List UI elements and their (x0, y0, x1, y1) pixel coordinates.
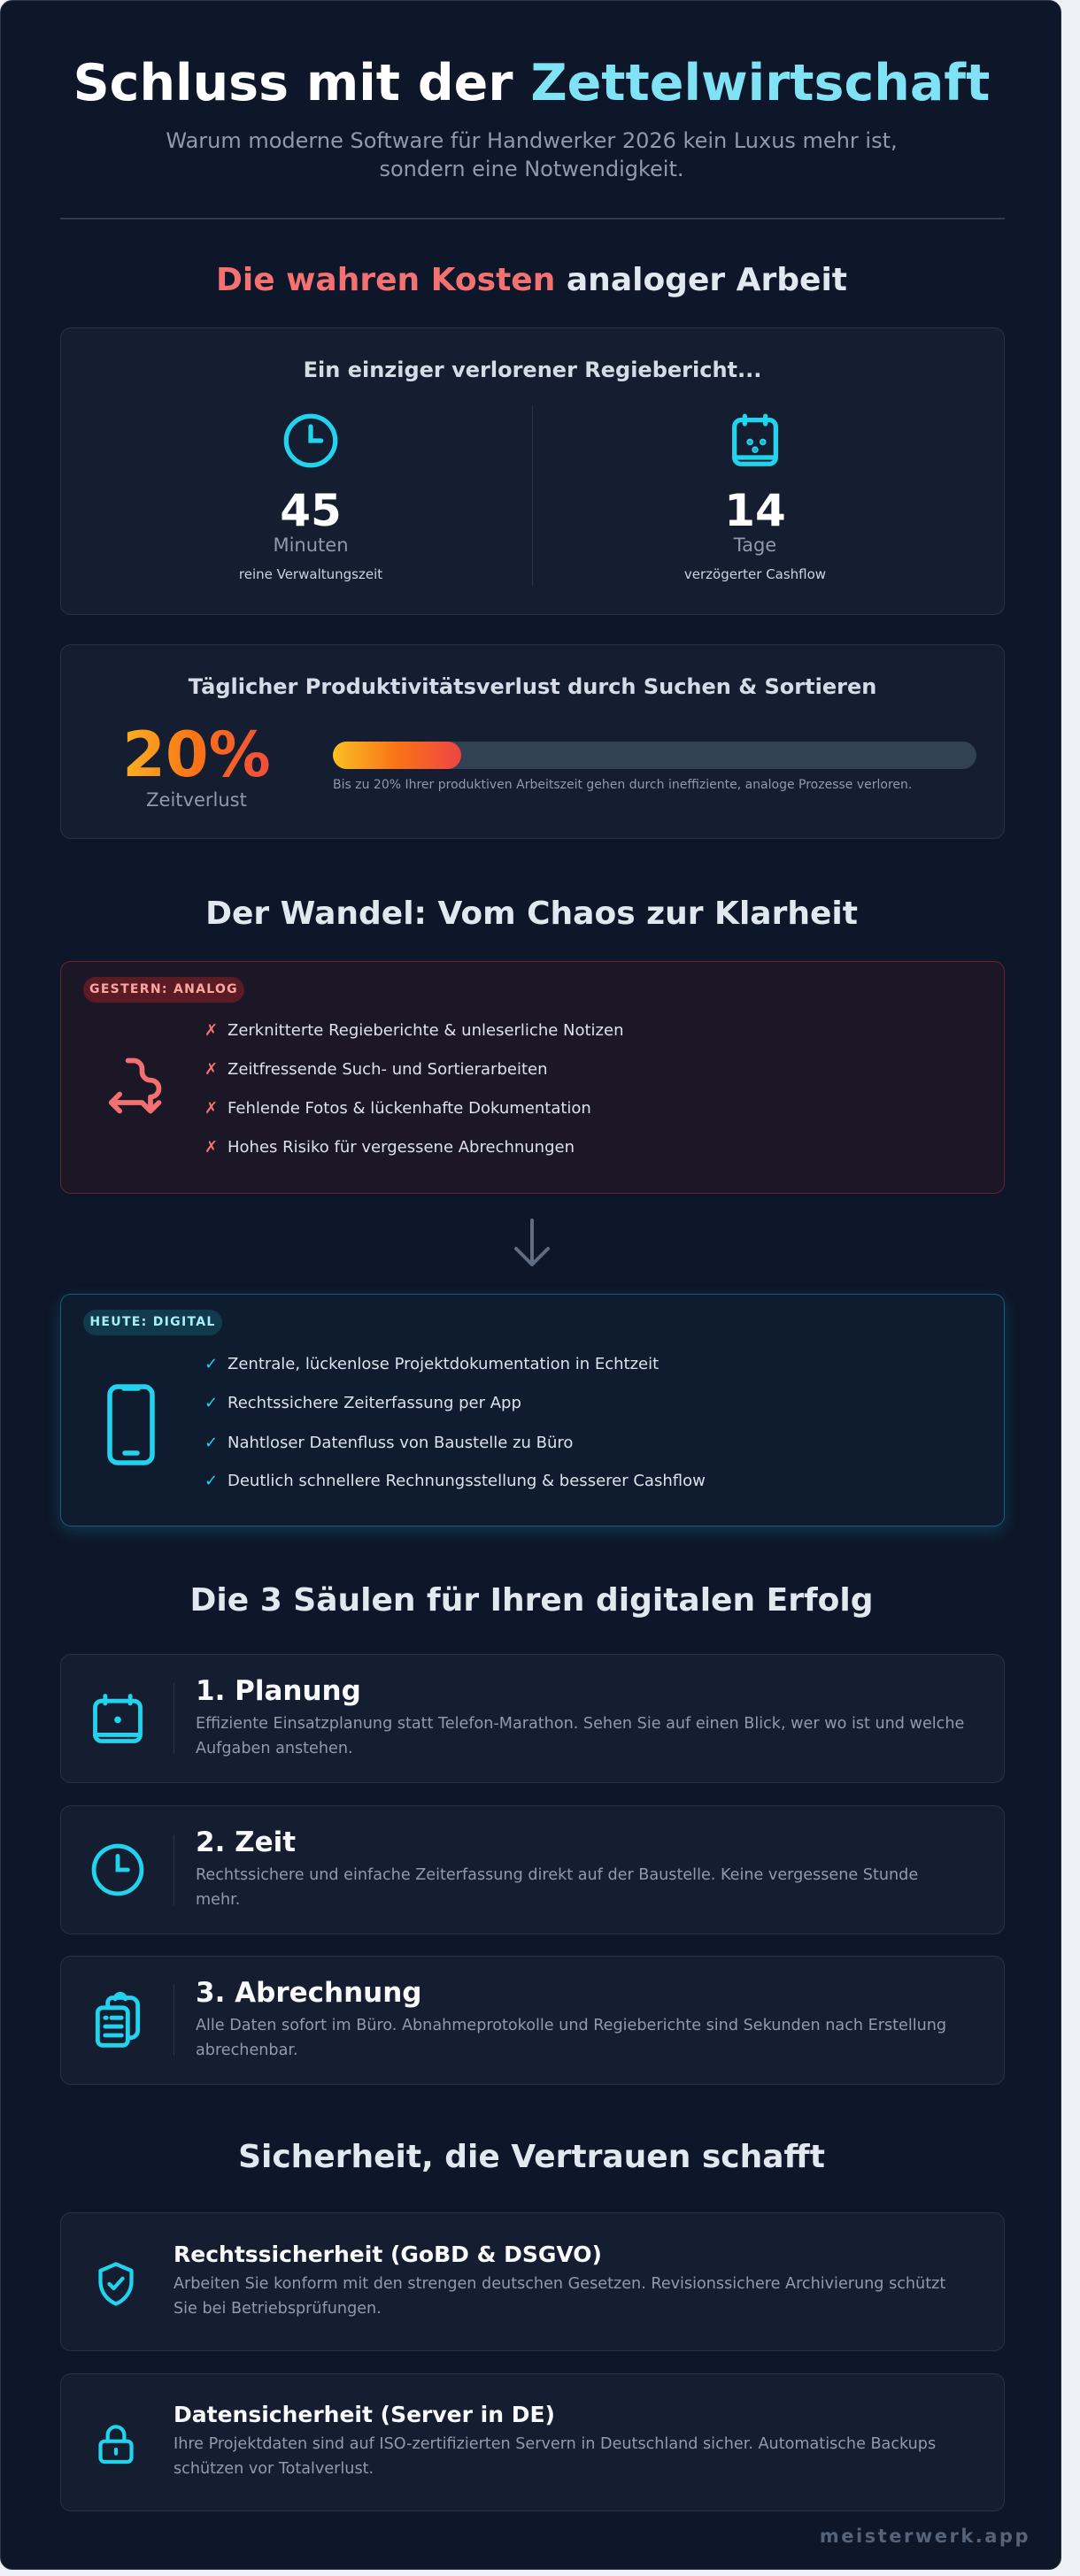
list: analog problems: ✗ (204, 1021, 218, 1040)
pillar text: mehr. (196, 1891, 240, 1909)
security text (174, 2242, 945, 2318)
icon: clipboard (96, 1991, 140, 2048)
panel: yesterday analog (60, 961, 1005, 1194)
security text: Ihre Projektdaten sind auf ISO-zertifizierten Servern in Deutschland sicher. Automatische Backups (174, 2435, 936, 2453)
list: digital benefits: ✓ (204, 1434, 218, 1452)
pillar: time (60, 1805, 1005, 1934)
stat: 14 days: Tage (734, 534, 776, 556)
big stat 20%: Zeitverlust (146, 789, 247, 811)
title: Schluss mit der Zettelwirtschaft (73, 54, 990, 112)
list: digital benefits: Deutlich schnellere Rechnungsstellung & besserer Cashflow (228, 1472, 706, 1490)
panel: today digital (60, 1294, 1005, 1526)
list: digital benefits: ✓ (204, 1355, 218, 1373)
progress bar (333, 742, 976, 769)
pillar text (196, 1826, 918, 1909)
stat: 45 minutes: 45 (280, 485, 342, 536)
security card: data (60, 2373, 1005, 2511)
card heading: Ein einziger verlorener Regiebericht... (304, 358, 761, 382)
pillar text: Effiziente Einsatzplanung statt Telefon-Marathon. Sehen Sie auf einen Blick, wer wo ist und welche Aufgaben anstehen. (196, 1715, 964, 1757)
icon: clock (283, 414, 338, 467)
badge: GESTERN: GESTERN: ANALOG (89, 982, 238, 996)
card heading: Täglicher Produktivitätsverlust durch Suchen & Sortieren (189, 674, 876, 699)
heading: security: Sicherheit, die Vertrauen schafft (238, 2139, 825, 2175)
list: analog problems: Hohes Risiko für vergessene Abrechnungen (228, 1138, 575, 1157)
security text: Rechtssicherheit (GoBD & DSGVO) (174, 2242, 602, 2267)
panel: productivity loss (60, 644, 1005, 839)
security text: schützen vor Totalverlust. (174, 2460, 374, 2478)
icon: return arrow (108, 1058, 161, 1113)
icon: clock (92, 1844, 143, 1895)
stat: 14 days: verzögerter Cashflow (684, 566, 826, 582)
big stat 20%: 20% (122, 719, 271, 791)
security text (174, 2402, 936, 2478)
list: digital benefits: Zentrale, lückenlose Projektdokumentation in Echtzeit (228, 1355, 659, 1373)
heading: pillars: Die 3 Säulen für Ihren digitalen Erfolg (190, 1582, 873, 1619)
stat: 14 days (684, 414, 826, 582)
icon: calendar (93, 1694, 143, 1743)
stat: 14 days: 14 (724, 485, 786, 536)
list: analog problems: Zeitfressende Such- und Sortierarbeiten (228, 1060, 548, 1079)
pillar text: 2. Zeit (196, 1826, 296, 1858)
subtitle: sondern eine Notwendigkeit. (379, 157, 684, 181)
pillar text: 1. Planung (196, 1675, 361, 1707)
stat: 45 minutes (239, 414, 382, 582)
icon: shield check (98, 2262, 134, 2306)
badge: HEUTE: HEUTE: DIGITAL (89, 1315, 216, 1329)
list: analog problems: ✗ (204, 1060, 218, 1079)
bar caption: Bis zu 20% Ihrer produktiven Arbeitszeit gehen durch ineffiziente, analoge Prozesse verloren. (333, 778, 912, 792)
list: analog problems (204, 1021, 623, 1157)
heading: transformation: Der Wandel: Vom Chaos zur Klarheit (205, 896, 858, 932)
security text: Datensicherheit (Server in DE) (174, 2402, 555, 2427)
icon: smartphone (107, 1384, 155, 1465)
panel: lost report (60, 327, 1005, 615)
pillar: planning (60, 1654, 1005, 1783)
pillar text: Alle Daten sofort im Büro. Abnahmeprotokolle und Regieberichte sind Sekunden nach Erstellung (196, 2017, 946, 2034)
list: analog problems: ✗ (204, 1138, 218, 1157)
pillar text: Rechtssichere und einfache Zeiterfassung direkt auf der Baustelle. Keine vergessene Stunde (196, 1866, 918, 1884)
list: analog problems: ✗ (204, 1099, 218, 1118)
stat: 45 minutes: reine Verwaltungszeit (239, 566, 382, 582)
heading: costs: Die wahren Kosten analoger Arbeit (216, 262, 847, 298)
icon: calendar (732, 414, 778, 466)
badge: GESTERN (83, 977, 244, 1003)
pillar text (196, 1675, 964, 1757)
security text: Arbeiten Sie konform mit den strengen deutschen Gesetzen. Revisionssichere Archivierung schützt (174, 2275, 945, 2293)
list: digital benefits: Nahtloser Datenfluss von Baustelle zu Büro (228, 1434, 573, 1452)
list: digital benefits: Rechtssichere Zeiterfassung per App (228, 1394, 521, 1412)
pillar text: abrechenbar. (196, 2042, 298, 2059)
list: digital benefits (204, 1355, 706, 1490)
list: digital benefits: ✓ (204, 1394, 218, 1412)
pillar text (196, 1977, 946, 2059)
subtitle (166, 128, 898, 181)
list: analog problems: Zerknitterte Regieberichte & unleserliche Notizen (228, 1021, 623, 1040)
subtitle: Warum moderne Software für Handwerker 2026 kein Luxus mehr ist, (166, 128, 898, 153)
list: analog problems: Fehlende Fotos & lückenhafte Dokumentation (228, 1099, 591, 1118)
pillar text: 3. Abrechnung (196, 1977, 421, 2009)
list: digital benefits: ✓ (204, 1472, 218, 1490)
arrow: down (513, 1219, 551, 1266)
security card: legal (60, 2212, 1005, 2351)
icon: lock (98, 2425, 134, 2464)
pillar: billing (60, 1956, 1005, 2085)
badge: HEUTE (83, 1310, 222, 1335)
security text: Sie bei Betriebsprüfungen. (174, 2300, 382, 2318)
footer brand: meisterwerk.app (820, 2526, 1030, 2547)
stat: 45 minutes: Minuten (273, 534, 349, 556)
